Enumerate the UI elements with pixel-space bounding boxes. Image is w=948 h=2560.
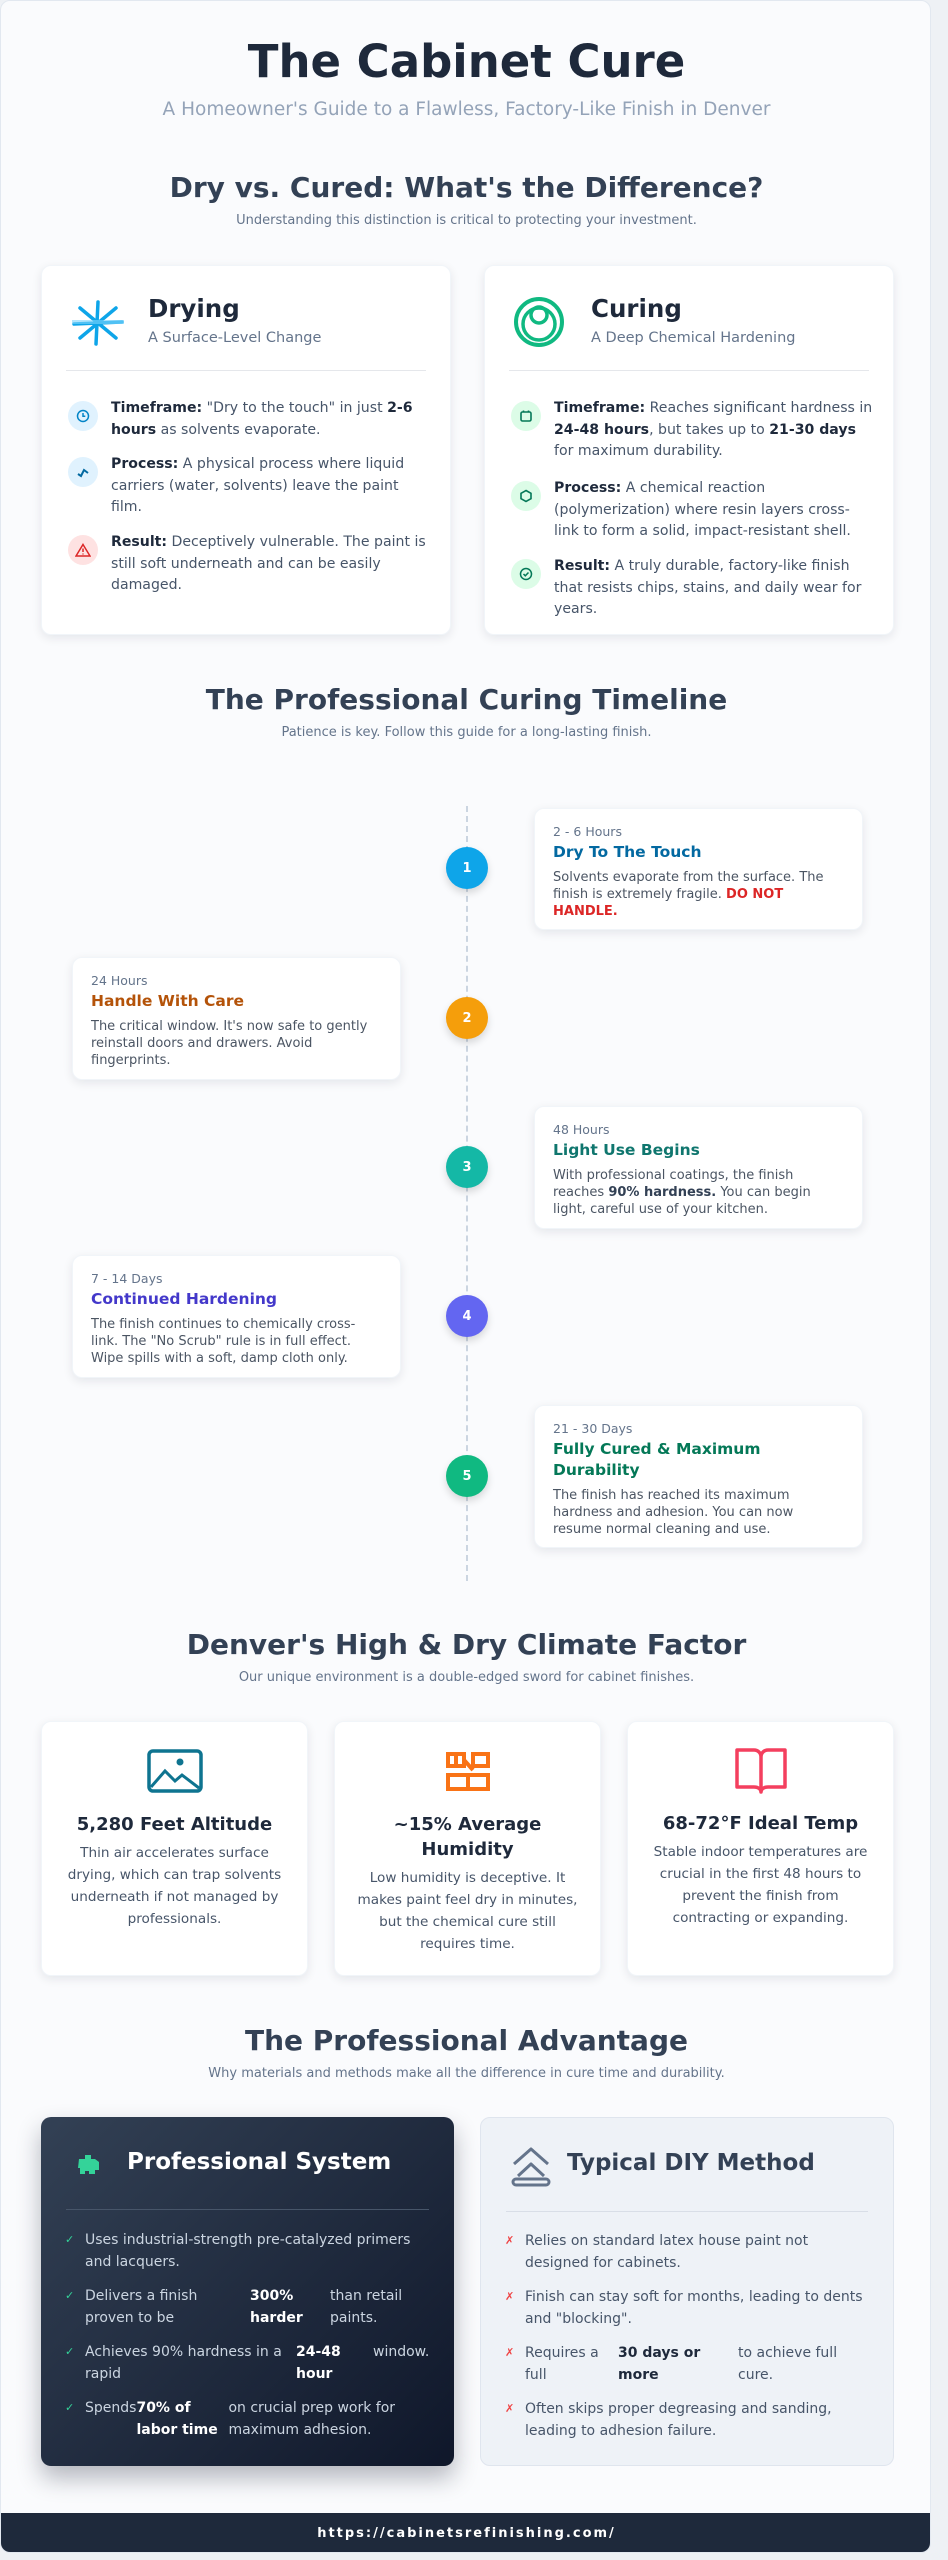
- subheading: drying: A Surface-Level Change: [148, 330, 321, 346]
- marker 4: [446, 1295, 488, 1337]
- list: Spends: [85, 2400, 136, 2416]
- item: timeframe: Timeframe: Reaches significant hardness in: [554, 400, 872, 416]
- list: 300% harder: [250, 2288, 303, 2326]
- list: Requires a full: [525, 2345, 599, 2383]
- item: process: link to form a solid, impact-resistant shell.: [554, 523, 851, 539]
- item: timeframe: for maximum durability.: [554, 443, 723, 459]
- item: result: Result: A truly durable, factory-like finish that resists chips, stains, and daily wear for years.: [554, 558, 861, 617]
- subheading: climate: Our unique environment is a double-edged sword for cabinet finishes.: [239, 1670, 694, 1685]
- item: process: Process: A physical process where liquid carriers (water, solvents) leave the paint film.: [111, 456, 404, 515]
- panel: curing: [484, 265, 894, 635]
- card: dry to the touch: Dry To The Touch: [553, 843, 702, 861]
- marker 5: 5: [462, 1468, 472, 1484]
- card: light use begins: With professional coatings, the finish reaches 90% hardness. You can begin light, careful use of your kitchen.: [553, 1168, 811, 1217]
- card: continued hardening: Continued Hardening: [91, 1290, 277, 1308]
- item: timeframe: 24-48 hours, but takes up to 21-30 days: [554, 422, 856, 438]
- list: to achieve full cure.: [738, 2345, 837, 2383]
- card: light use begins: [534, 1106, 863, 1229]
- list: Often skips proper degreasing and sanding, leading to adhesion failure.: [525, 2401, 832, 2439]
- step 2: [70, 957, 490, 1084]
- icon: grid: [446, 1752, 490, 1791]
- title: The Cabinet Cure: [248, 35, 685, 88]
- icon: rings: [514, 297, 564, 347]
- step 1: [444, 808, 864, 934]
- card: handle with care: Handle With Care: [91, 992, 244, 1010]
- step 4: [70, 1255, 490, 1382]
- marker 1: 1: [462, 860, 472, 876]
- marker 2: 2: [462, 1010, 472, 1026]
- title: ~15% Average: [394, 1814, 541, 1835]
- icon: book: [735, 1748, 787, 1794]
- marker 1: [446, 847, 488, 889]
- subtitle: A Homeowner's Guide to a Flawless, Factory-Like Finish in Denver: [163, 99, 770, 120]
- panel: diy method: [480, 2117, 894, 2466]
- text: Low humidity is deceptive. It makes paint feel dry in minutes, but the chemical cure still requires time.: [358, 1870, 577, 1952]
- heading: timeline: The Professional Curing Timeline: [206, 683, 727, 716]
- marker 4: 4: [462, 1308, 472, 1324]
- marker 5: [446, 1455, 488, 1497]
- card: light use begins: 48 Hours: [553, 1122, 610, 1137]
- list: 24-48 hour: [296, 2344, 341, 2382]
- list: ✓: [65, 2289, 74, 2302]
- card: altitude: [41, 1721, 308, 1976]
- heading: curing: Curing: [591, 294, 682, 323]
- footer: https://cabinetsrefinishing.com/: [317, 2526, 616, 2541]
- card: handle with care: The critical window. It's now safe to gently reinstall doors and drawers. Avoid fingerprints.: [91, 1019, 367, 1068]
- list: [505, 2233, 863, 2439]
- list: 70% of labor time: [136, 2400, 218, 2438]
- list: Relies on standard latex house paint not designed for cabinets.: [525, 2233, 808, 2271]
- list: Finish can stay soft for months, leading to dents and "blocking".: [525, 2289, 863, 2327]
- subheading: curing: A Deep Chemical Hardening: [591, 330, 795, 346]
- card: light use begins: Light Use Begins: [553, 1141, 700, 1159]
- list: ✓: [65, 2233, 74, 2246]
- subheading: dry vs cured: Understanding this distinction is critical to protecting your investment.: [236, 213, 697, 228]
- title: [394, 1814, 541, 1860]
- heading: advantage: The Professional Advantage: [245, 2024, 688, 2057]
- card: dry to the touch: 2 - 6 Hours: [553, 824, 622, 839]
- list: ✓: [65, 2401, 74, 2414]
- card: fully cured: 21 - 30 Days: [553, 1421, 632, 1436]
- marker 3: [446, 1146, 488, 1188]
- list: on crucial prep work for maximum adhesion.: [228, 2400, 395, 2438]
- heading: dry vs cured: Dry vs. Cured: What's the Difference?: [170, 171, 763, 204]
- card: handle with care: [72, 957, 401, 1080]
- item: process: Process: A chemical reaction: [554, 480, 765, 496]
- list: than retail paints.: [330, 2288, 402, 2326]
- step 3: [444, 1106, 864, 1234]
- card: humidity: [334, 1721, 601, 1976]
- footer: [1, 2513, 932, 2554]
- list: 30 days or more: [618, 2345, 700, 2383]
- marker 2: [446, 997, 488, 1039]
- list: Achieves 90% hardness in a rapid: [85, 2344, 282, 2382]
- item: process: [511, 480, 851, 539]
- list: ✗: [505, 2402, 514, 2415]
- list: Uses industrial-strength pre-catalyzed primers and lacquers.: [85, 2232, 410, 2270]
- item: result: Result: Deceptively vulnerable. The paint is still soft underneath and can be easily damaged.: [111, 534, 426, 593]
- icon: image: [147, 1749, 203, 1793]
- list: Delivers a finish proven to be: [85, 2288, 197, 2326]
- card: continued hardening: [72, 1255, 401, 1378]
- icon: layers: [512, 2147, 550, 2186]
- panel: professional system: [41, 2117, 454, 2466]
- text: Thin air accelerates surface drying, which can trap solvents underneath if not managed by professionals.: [68, 1845, 281, 1927]
- title: 68-72°F Ideal Temp: [663, 1813, 858, 1834]
- list: ✗: [505, 2234, 514, 2247]
- card: continued hardening: The finish continues to chemically cross-link. The "No Scrub" rule is in full effect. Wipe spills with a soft, damp cloth only.: [91, 1317, 355, 1366]
- heading: Professional System: [127, 2149, 391, 2175]
- title: Humidity: [421, 1839, 514, 1860]
- heading: Typical DIY Method: [567, 2150, 815, 2176]
- card: continued hardening: 7 - 14 Days: [91, 1271, 162, 1286]
- list: ✓: [65, 2345, 74, 2358]
- card: dry to the touch: [534, 808, 863, 930]
- card: fully cured: [534, 1405, 863, 1548]
- subheading: timeline: Patience is key. Follow this guide for a long-lasting finish.: [281, 725, 652, 740]
- card: dry to the touch: Solvents evaporate from the surface. The finish is extremely fragile. DO NOT HANDLE.: [553, 870, 824, 919]
- item: process: (polymerization) where resin layers cross-: [554, 502, 850, 518]
- item: timeframe: Timeframe: "Dry to the touch" in just 2-6 hours as solvents evaporate.: [111, 400, 413, 438]
- subheading: advantage: Why materials and methods make all the difference in cure time and durability.: [208, 2066, 725, 2081]
- step 5: [444, 1405, 864, 1552]
- title: 5,280 Feet Altitude: [77, 1814, 272, 1835]
- icon: snowflake: [72, 300, 124, 346]
- panel: drying: [41, 265, 451, 635]
- heading: climate: Denver's High & Dry Climate Factor: [187, 1628, 746, 1661]
- list: [65, 2232, 429, 2438]
- timeline: [70, 806, 864, 1581]
- text: Stable indoor temperatures are crucial in the first 48 hours to prevent the finish from contracting or expanding.: [654, 1844, 867, 1926]
- list: ✗: [505, 2346, 514, 2359]
- item: timeframe: [511, 400, 872, 459]
- card: temperature: [627, 1721, 894, 1976]
- card: handle with care: 24 Hours: [91, 973, 148, 988]
- list: window.: [373, 2344, 429, 2360]
- card: fully cured: The finish has reached its maximum hardness and adhesion. You can now resume normal cleaning and use.: [553, 1488, 793, 1537]
- icon: puzzle: [78, 2155, 99, 2174]
- heading: drying: Drying: [148, 294, 240, 323]
- marker 3: 3: [462, 1160, 472, 1174]
- card: fully cured: Fully Cured & Maximum Durability: [553, 1440, 760, 1479]
- list: ✗: [505, 2290, 514, 2303]
